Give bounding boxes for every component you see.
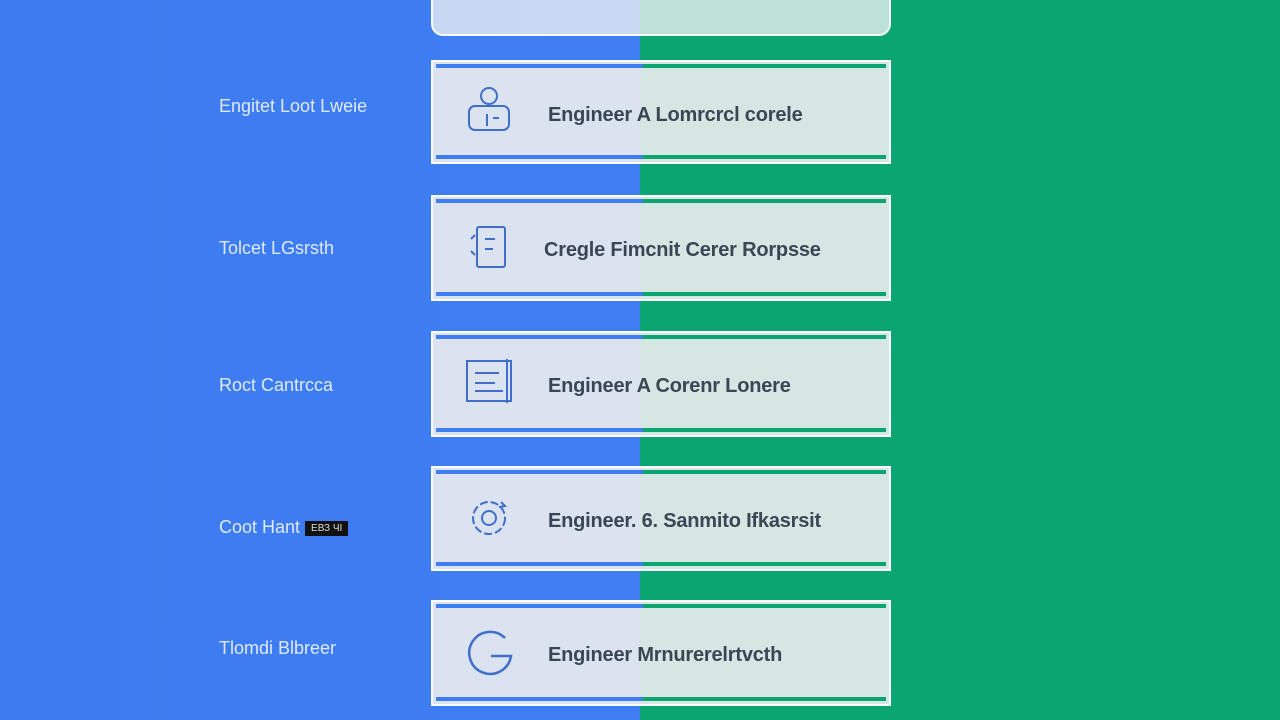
text: Engineer. 6. Sanmito Ifkasrsit bbox=[548, 510, 821, 532]
text: Cregle Fimcnit Cerer Rorpsse bbox=[544, 239, 821, 261]
row 5 card bbox=[431, 600, 891, 706]
row 1 card bbox=[431, 60, 891, 164]
row 3 label: Roct Cantrcca bbox=[219, 375, 333, 395]
text: Engineer A Corenr Lonere bbox=[548, 375, 791, 397]
icon: document bbox=[470, 226, 506, 268]
row 4 card bbox=[431, 466, 891, 571]
row 4 label: Coot Hant ЕВЗ ЧІ bbox=[219, 517, 342, 537]
icon: chart board bbox=[466, 359, 512, 403]
icon: person bbox=[468, 87, 510, 131]
text: Engineer Mrnurerelrtvcth bbox=[548, 644, 782, 666]
top partial card bbox=[431, 0, 891, 36]
row 2 label: Tolcet LGsrsth bbox=[219, 238, 334, 258]
icon: G logo bbox=[468, 630, 512, 676]
text: Engineer A Lomrcrcl corele bbox=[548, 104, 803, 126]
row 2 card bbox=[431, 195, 891, 301]
icon: gear cycle bbox=[472, 501, 507, 535]
row 5 label: Tlomdi Blbreer bbox=[219, 638, 336, 658]
row 1 label: Engitet Loot Lweie bbox=[219, 96, 367, 116]
row 3 card bbox=[431, 331, 891, 437]
